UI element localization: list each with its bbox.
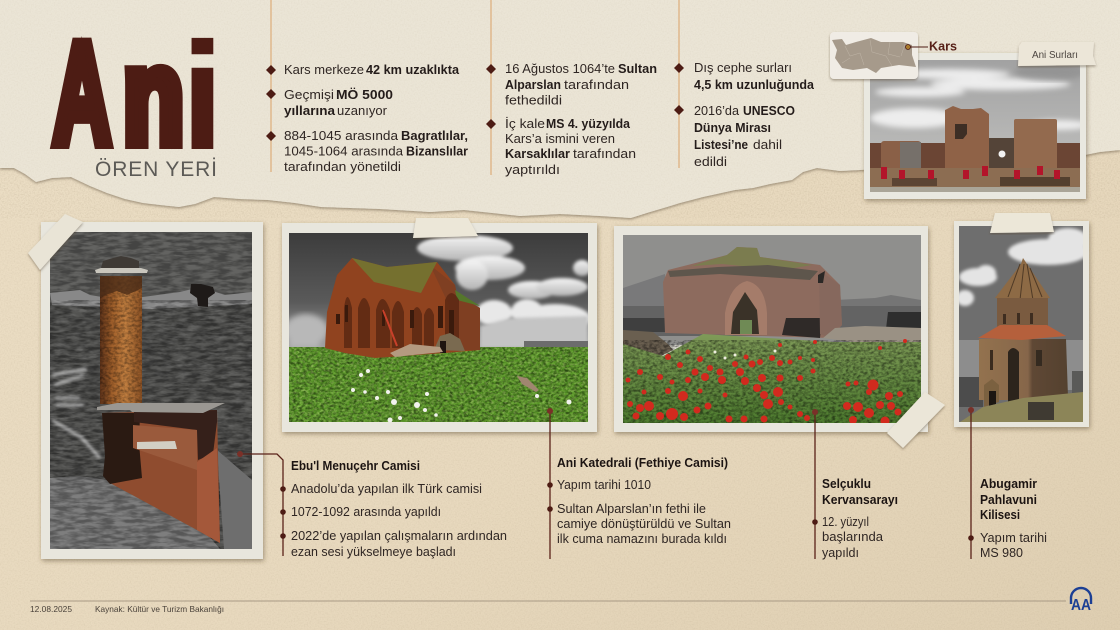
callout: Ebu'l Menuçehr Camisi (237, 451, 507, 559)
bullet: inner castle: İç kale (505, 117, 545, 131)
details: MS 980 (980, 546, 1023, 560)
locator map: Turkey (830, 32, 928, 79)
icon: AA logo (1071, 588, 1091, 614)
heading: Pahlavuni (980, 493, 1037, 507)
heading: Selçuklu (822, 477, 871, 491)
tape on cathedral photo (413, 218, 478, 238)
heading: Ani Katedrali (Fethiye Camisi) (557, 456, 728, 470)
details: Yapım tarihi 1010 (557, 478, 651, 492)
title: Ani (53, 12, 224, 182)
callout: Selçuklu Kervansarayı (812, 409, 898, 560)
title: Ani: i (182, 12, 224, 182)
details (980, 531, 1047, 560)
bullet: rulers: 1045-1064 arasında (284, 144, 403, 158)
heading: Kervansarayı (822, 493, 898, 507)
details: 1072-1092 arasında yapıldı (291, 505, 441, 519)
bullet: history: MÖ 5000 (336, 87, 393, 102)
footer source: Kaynak: Kültür ve Turizm Bakanlığı (95, 604, 224, 614)
icon: Turkey silhouette (832, 38, 916, 73)
bullet: conquest: Sultan (618, 62, 657, 76)
bullet: history (266, 87, 393, 118)
bullet: conquest: tarafından (564, 78, 629, 92)
details: Anadolu’da yapılan ilk Türk camisi (291, 482, 482, 496)
title: Ani: n (123, 22, 184, 172)
bullet: UNESCO (674, 104, 795, 169)
details: 2022’de yapılan çalışmaların ardından (291, 529, 507, 543)
bullet: rulers: tarafından yönetildi (284, 160, 401, 174)
photo: Abugamir Pahlavuni Church (954, 221, 1089, 427)
bullet: UNESCO: dahil (753, 138, 782, 152)
heading: Abugamir (980, 477, 1037, 491)
title: Ani: A (53, 14, 111, 174)
tape on church photo (990, 213, 1054, 233)
photo: Ani walls (855, 53, 1090, 199)
details (291, 482, 507, 559)
photo: Seljuk Caravanserai (614, 226, 928, 432)
bullet: conquest: Alparslan (505, 78, 561, 92)
photo: Ani Cathedral (282, 223, 597, 432)
photo: Ebu'l Menuçehr Mosque (41, 222, 263, 559)
tape on mosque photo (28, 214, 83, 270)
bullet: inner castle: MS 4. yüzyılda (546, 117, 631, 131)
details: 12. yüzyıl (822, 515, 869, 529)
bullet: inner castle: tarafından (573, 147, 636, 161)
bullet: rulers: Bagratlılar, (401, 129, 468, 143)
bullet: UNESCO: Dünya Mirası (694, 121, 771, 135)
details: Sultan Alparslan’ın fethi ile (557, 502, 706, 516)
bullet column 3 (674, 0, 815, 169)
bullet: conquest (486, 62, 657, 108)
details: yapıldı (822, 546, 859, 560)
bullet: history: yıllarına (284, 104, 336, 118)
bullet: inner castle (486, 117, 636, 177)
heading (980, 477, 1037, 522)
details (822, 515, 883, 560)
bullet: UNESCO: Listesi’ne (694, 138, 748, 152)
label tag: Ani Surları: Ani Surları (1032, 50, 1078, 61)
details: ilk cuma namazını burada kıldı (557, 532, 727, 546)
bullet: rulers: Bizanslılar (406, 144, 468, 158)
footer date: 12.08.2025 (30, 604, 72, 614)
bullet column 2 (486, 0, 657, 177)
bullet: UNESCO: 2016’da (694, 104, 739, 118)
bullet: distance: Kars merkeze (284, 63, 364, 77)
subtitle: Ören Yeri: ÖREN YERİ (95, 158, 217, 181)
bullet: conquest: fethedildi (505, 94, 562, 108)
details: başlarında (822, 530, 883, 544)
bullet: inner castle: yaptırıldı (505, 163, 560, 177)
bullet: walls (674, 61, 815, 92)
icon: AA logo: AA (1071, 597, 1091, 614)
details: ezan sesi yükselmeye başladı (291, 545, 456, 559)
heading: Kilisesi (980, 508, 1020, 522)
bullet: inner castle: Karsaklılar (505, 147, 570, 161)
heading (822, 477, 898, 507)
bullet: UNESCO: edildi (694, 155, 727, 169)
callout: Ani Katedrali (547, 408, 731, 559)
heading: Ebu'l Menuçehr Camisi (291, 459, 420, 473)
map label: Kars: Kars (929, 38, 957, 54)
bullet: walls: Dış cephe surları (694, 61, 792, 75)
bullet: walls: 4,5 km uzunluğunda (694, 78, 815, 92)
bullet: distance (266, 63, 460, 77)
bullet: conquest: 16 Ağustos 1064’te (505, 62, 615, 76)
bullet: inner castle: Kars’a ismini veren (505, 132, 615, 146)
details: Yapım tarihi (980, 531, 1047, 545)
upper torn paper (0, 0, 1120, 218)
callout: Abugamir Pahlavuni Kilisesi (968, 407, 1047, 560)
bullet: history: uzanıyor (337, 104, 387, 118)
details (557, 478, 731, 546)
bullet: history: Geçmişi (284, 88, 334, 102)
bullet: rulers (266, 129, 468, 174)
bullet column 1 (266, 0, 468, 174)
bullet: UNESCO: UNESCO (743, 104, 795, 118)
bullet: rulers: 884-1045 arasında (284, 129, 398, 143)
label tag: Ani Surları (1018, 42, 1096, 66)
tape on caravanserai photo (887, 392, 945, 448)
bullet: distance: 42 km uzaklıkta (366, 63, 460, 77)
details: camiye dönüştürüldü ve Sultan (557, 517, 731, 531)
footer rule (30, 600, 1066, 602)
